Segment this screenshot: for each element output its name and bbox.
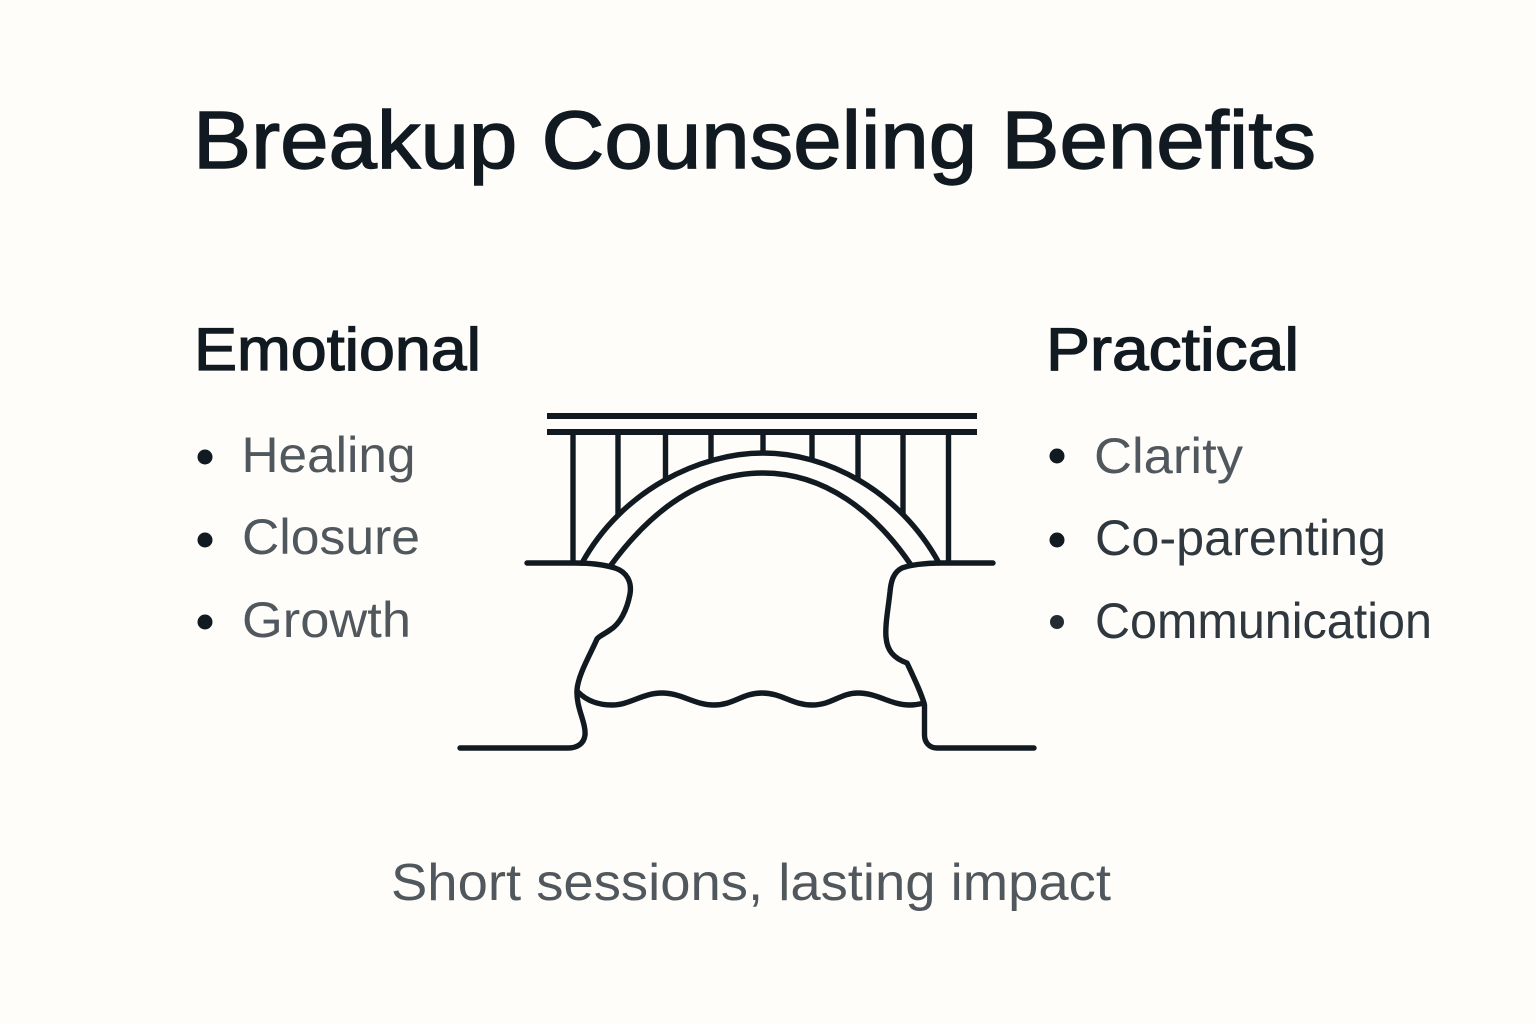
tagline: Short sessions, lasting impact <box>391 854 1112 912</box>
bridge arch <box>582 453 939 565</box>
water line <box>578 692 924 705</box>
list item: Growth: Growth <box>242 592 411 648</box>
bridge deck <box>547 416 977 432</box>
right cliff <box>886 563 1034 748</box>
list item: Healing: Healing <box>242 427 416 483</box>
list item: Co-parenting: Co-parenting <box>1095 510 1386 566</box>
heading: Emotional: Emotional <box>194 316 481 383</box>
panel: practical benefits <box>1046 316 1432 649</box>
left cliff <box>460 563 630 748</box>
icon: arch bridge over water <box>460 416 1034 748</box>
heading: Practical: Practical <box>1046 316 1299 383</box>
list item: Clarity: Clarity <box>1094 428 1243 484</box>
title: Breakup Counseling Benefits <box>193 95 1316 186</box>
list item: Communication: Communication <box>1095 593 1432 649</box>
bridge hangers <box>573 432 948 563</box>
list item: Closure: Closure <box>242 509 420 565</box>
panel: emotional benefits <box>194 316 481 648</box>
